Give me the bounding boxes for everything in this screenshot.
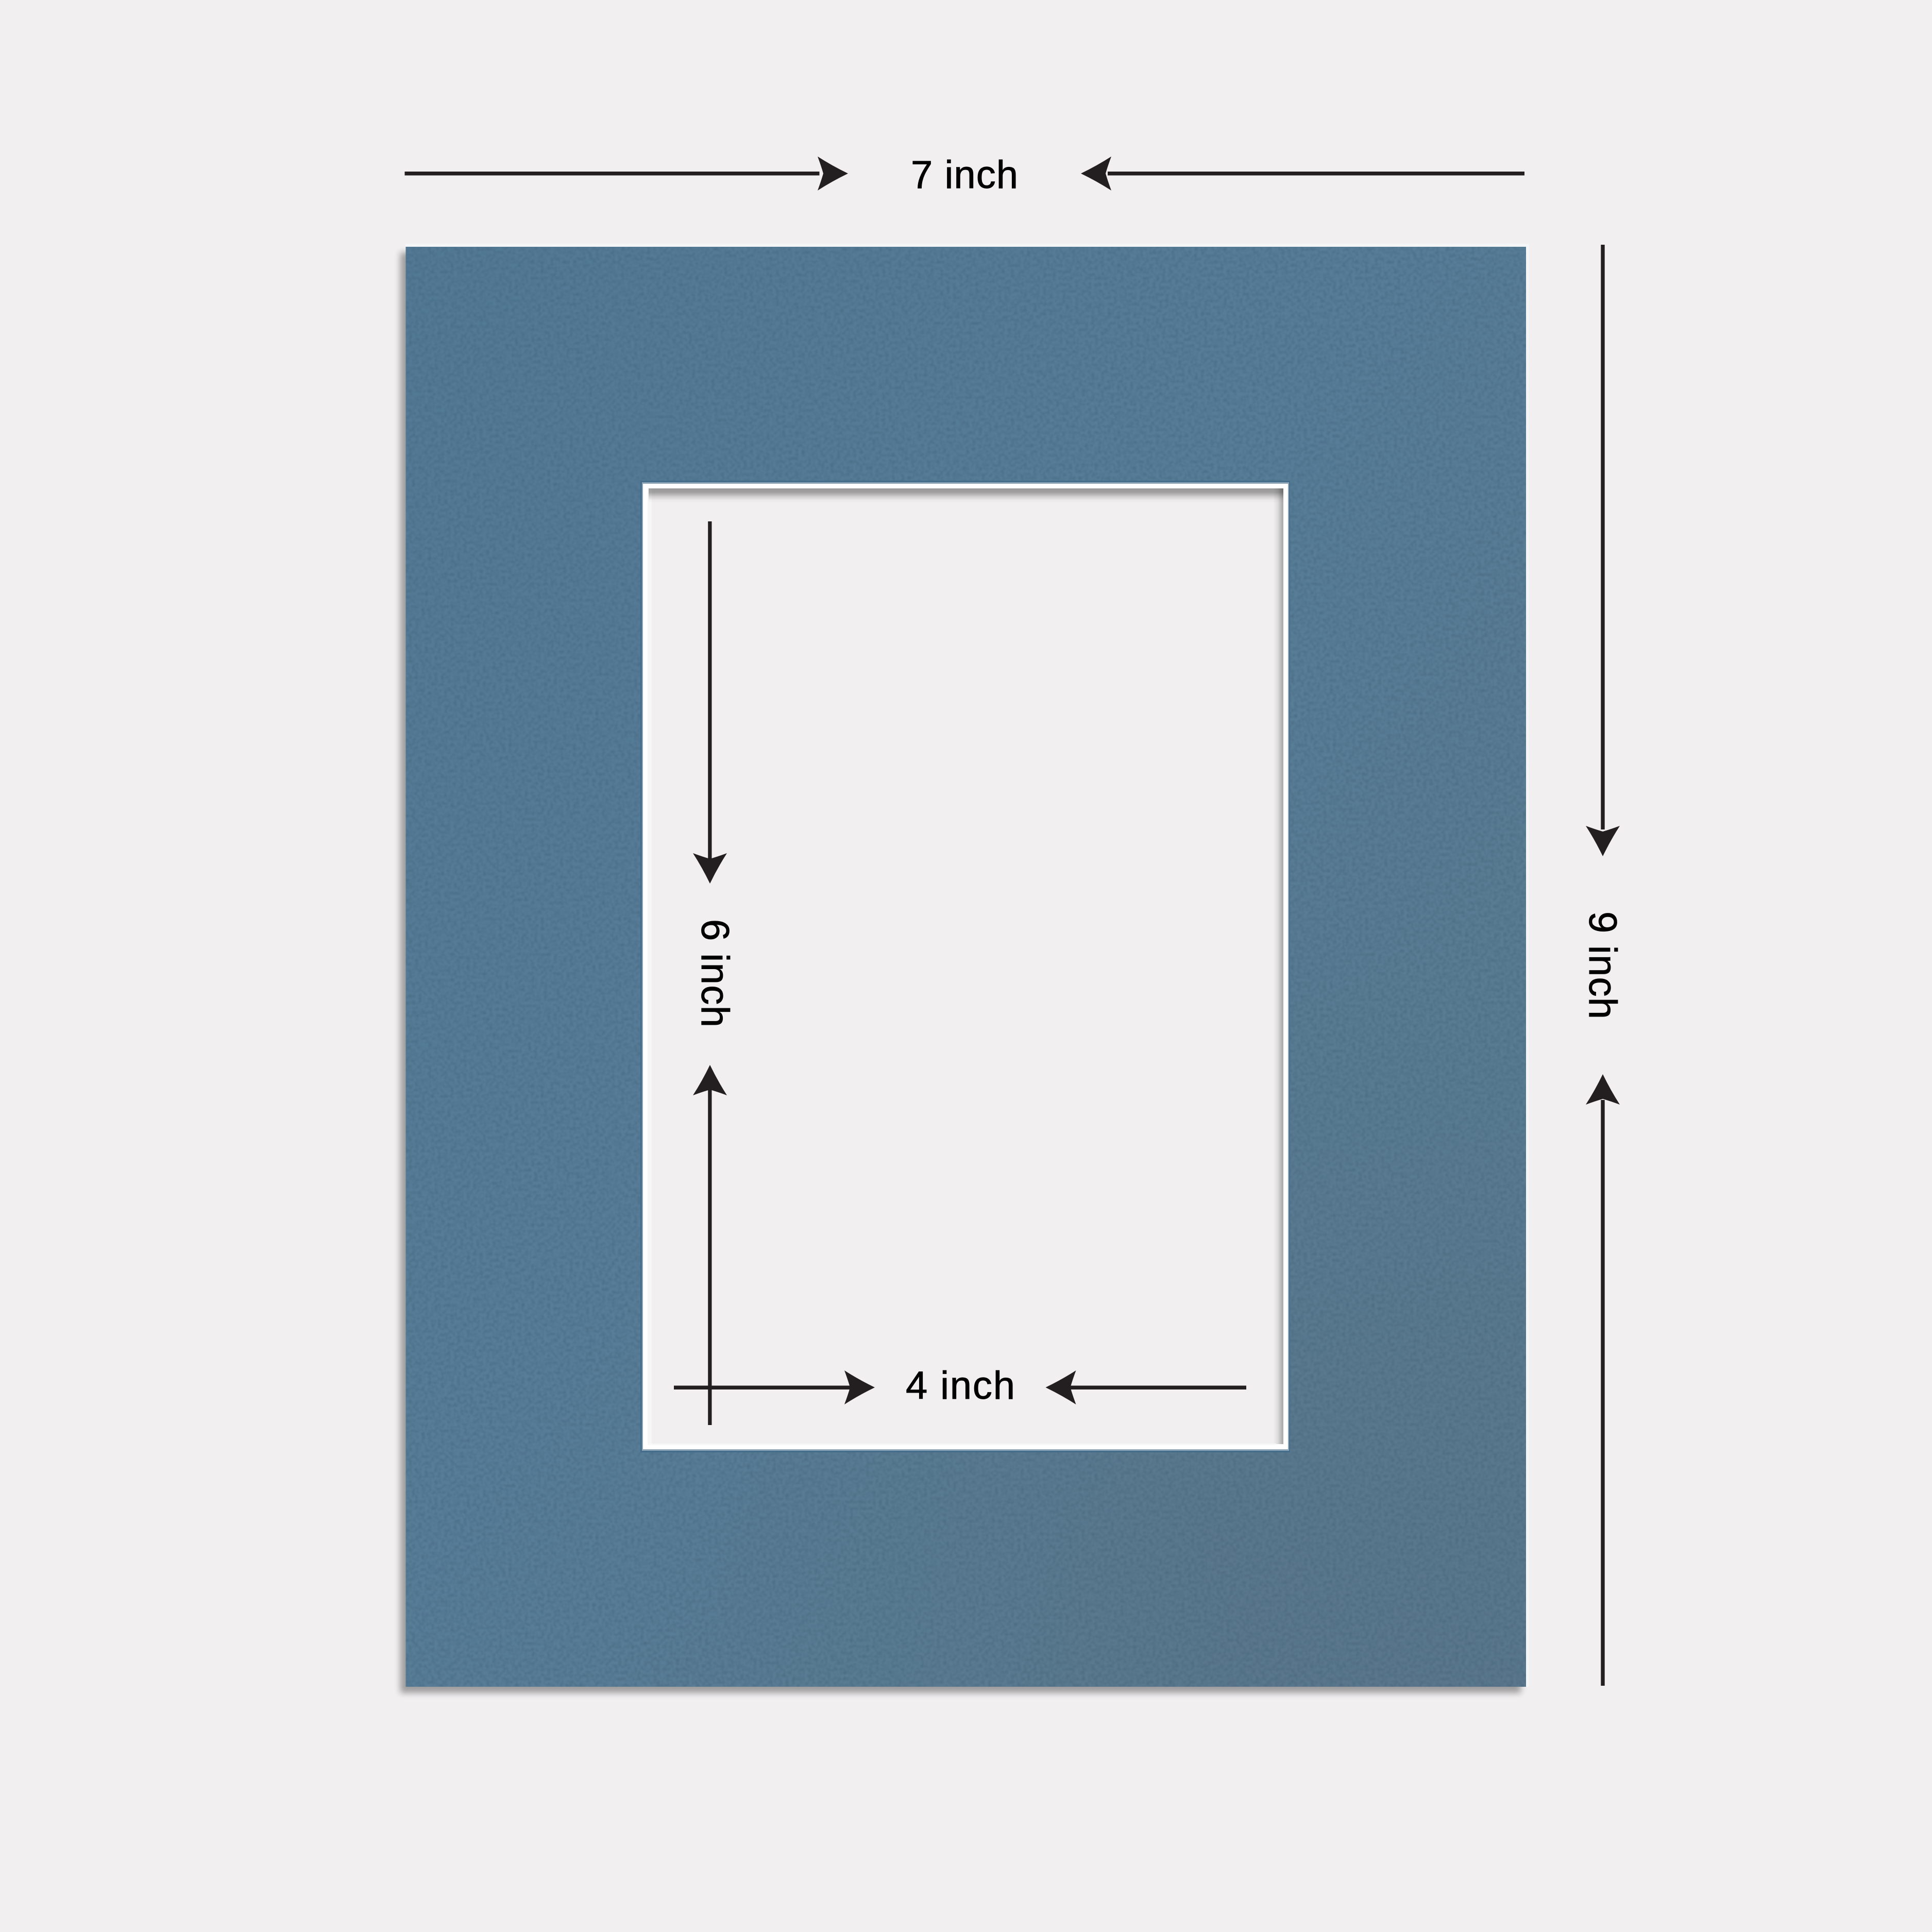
inner height dimension: 6 inch [693, 521, 737, 1425]
inner width dimension: 4 inch [674, 1364, 1246, 1408]
top inner shadow [649, 488, 1283, 503]
bevel dark outline [640, 481, 1290, 1452]
arrow: bottom pointing up [1586, 1074, 1620, 1686]
right dimension: 9 inch [1581, 245, 1624, 1686]
arrow: right pointing left [1081, 157, 1524, 191]
label: 7 inch: 7 inch [911, 153, 1018, 197]
top dimension: 7 inch [405, 153, 1524, 197]
mat edge highlight [405, 245, 1528, 1687]
bottom inner glow [648, 1444, 1276, 1445]
white bevel [643, 484, 1288, 1449]
label: 4 inch: 4 inch [906, 1364, 1015, 1408]
mat drop shadow [400, 252, 1521, 1693]
panel: blue mat board [400, 245, 1528, 1693]
mat surface [406, 247, 1526, 1687]
left inner glow [648, 488, 652, 1444]
arrow: left pointing right [674, 1370, 875, 1404]
arrow: top pointing down [1586, 245, 1620, 856]
right inner shadow [1273, 488, 1283, 1444]
arrow: right pointing left [1046, 1370, 1246, 1404]
window interior [648, 488, 1283, 1444]
arrow: left pointing right [405, 157, 848, 191]
label: 6 inch: 6 inch [693, 919, 737, 1027]
label: 9 inch: 9 inch [1581, 911, 1624, 1019]
arrow: top pointing down [693, 521, 727, 884]
window opening [640, 481, 1290, 1452]
arrow: bottom pointing up [693, 1065, 727, 1425]
